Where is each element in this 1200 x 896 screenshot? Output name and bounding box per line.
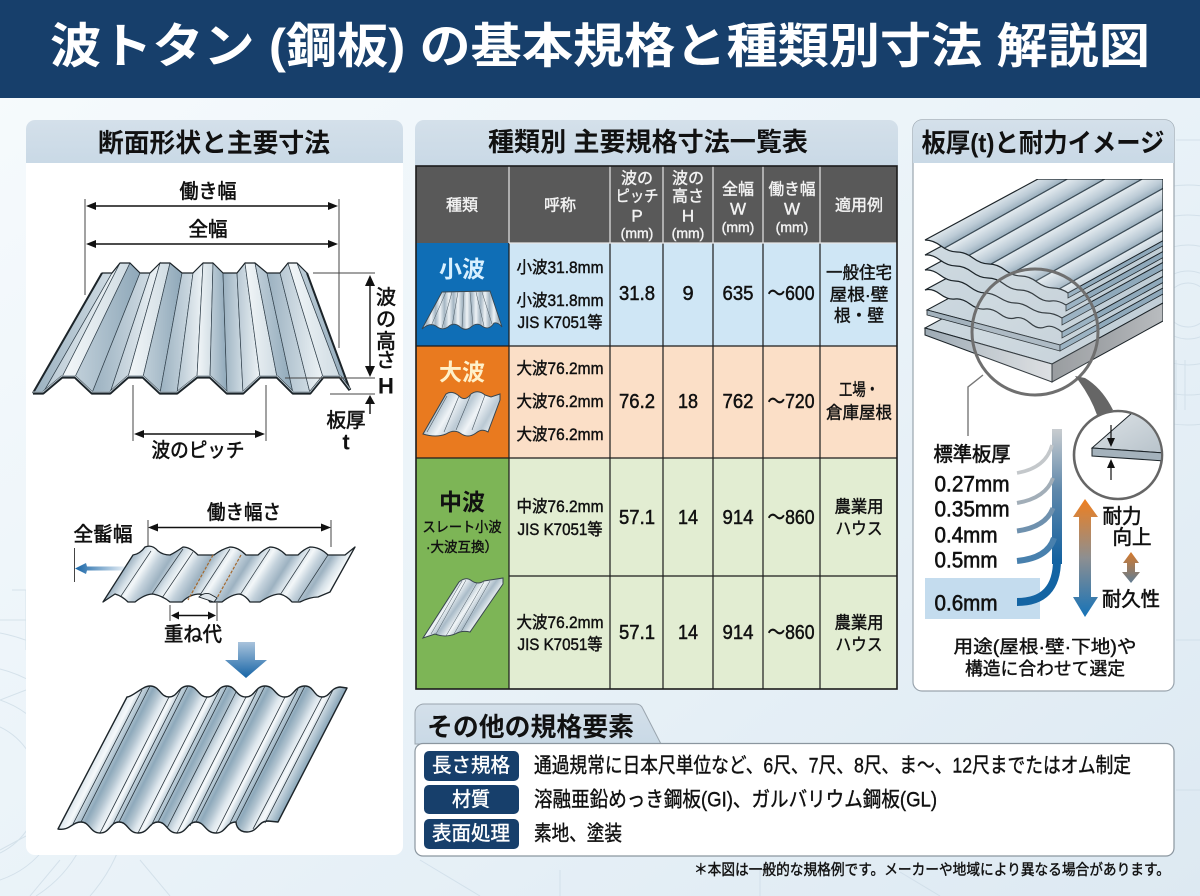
dimension: sheet thickness t: [326, 395, 375, 454]
row: interchangeable large wave: 大波76.2mm: [516, 613, 604, 632]
row: interchangeable large wave: JIS K7051等: [518, 635, 602, 654]
thickness list: 0.35mm: [934, 496, 1010, 522]
row: small wave: 屋根·壁: [830, 286, 888, 304]
row: small wave: JIS K7051等: [518, 313, 602, 332]
arrow: small trade-off: [1122, 552, 1140, 583]
dimension: full width: [86, 218, 338, 248]
dimension: full width arrow: 全髷幅: [74, 523, 132, 546]
panel: thickness and strength: [913, 120, 1174, 691]
thickness list: 標準板厚: [934, 443, 1010, 466]
dimension: wave pitch: 波のピッチ: [152, 439, 244, 462]
table header row: W: [784, 200, 800, 218]
row: large wave: ～720: [768, 391, 814, 413]
dimension: wave height H: さ: [376, 350, 396, 372]
panel: other specifications: [415, 704, 1174, 856]
row: large wave: 大波: [439, 359, 485, 385]
thickness list: 0.27mm: [934, 472, 1010, 496]
row: surface treatment: 素地、塗装: [534, 822, 622, 846]
icon: medium wave sheet: [423, 578, 503, 638]
detail circle: sheet thickness: [1074, 411, 1165, 499]
table header row: H: [682, 206, 694, 226]
thickness gradient curves: [1017, 429, 1062, 602]
row: medium wave: JIS K7051等: [518, 520, 602, 539]
row: large wave: 工場・: [839, 380, 879, 400]
row: interchangeable large wave: 農業用: [834, 614, 884, 632]
table header row: P: [631, 206, 643, 226]
row: small wave: 9: [682, 283, 694, 305]
table header row: 波の: [672, 170, 704, 188]
row: large wave: 大波76.2mm: [516, 425, 604, 444]
row: surface treatment: [424, 819, 622, 849]
row: small wave: 31.8: [619, 283, 655, 305]
dimension: full width: 全幅: [188, 218, 228, 241]
dimension: sheet thickness t: 板厚: [326, 409, 366, 432]
connector to detail circle: [1075, 376, 1113, 415]
table header row: 全幅: [722, 180, 754, 198]
label: durability: 耐久性: [1102, 588, 1160, 611]
row: interchangeable large wave: [516, 613, 884, 654]
selection note: 用途(屋根·壁·下地)や: [954, 637, 1136, 657]
dimension: full width arrow: [74, 523, 132, 582]
table header row: 働き幅: [768, 180, 816, 198]
dimension: working width: [85, 180, 339, 348]
row: large wave: 76.2: [619, 391, 655, 413]
dimension: working width of overlapped sheets: [148, 501, 331, 547]
row: small wave: 根・壁: [834, 306, 884, 326]
heading: table: 種類別 主要規格寸法一覧表: [488, 127, 808, 157]
title: 波トタン (鋼板) の基本規格と種類別寸法 解説図: [50, 20, 1150, 74]
row: medium wave: 14: [678, 507, 698, 529]
dimension: overlap: 重ね代: [164, 623, 222, 646]
label: strength up: [1102, 505, 1152, 549]
icon: small wave sheet: [422, 291, 502, 329]
row: small wave: [422, 256, 892, 332]
table header row: (mm): [722, 219, 754, 235]
table header row: (mm): [776, 219, 808, 235]
dimension: wave height H: 波: [376, 286, 396, 309]
table header row: 高さ: [672, 188, 704, 206]
arrow: strength and durability: [1073, 499, 1098, 617]
dimension: wave pitch: [133, 385, 266, 462]
heading: thickness: 板厚(t)と耐力イメージ: [922, 128, 1164, 158]
row: medium wave: スレート小波: [422, 519, 502, 535]
table grid and cell fills: [416, 166, 897, 689]
selection note: [954, 637, 1136, 679]
row: small wave: 一般住宅: [826, 264, 892, 282]
thickness list: 0.6mm: [934, 590, 998, 616]
icon: large wave sheet: [423, 392, 500, 436]
table header row: 種類: [446, 196, 478, 214]
row: medium wave: 農業用: [834, 498, 884, 516]
dimension: overlap: [164, 603, 222, 646]
title banner: [0, 0, 1200, 98]
dimension: wave height H: の: [376, 309, 396, 331]
thickness list: [925, 429, 1062, 619]
row: large wave: [423, 359, 892, 444]
arrow: down: [225, 642, 267, 678]
heading: other specifications: その他の規格要素: [427, 712, 634, 742]
row: material: [424, 785, 937, 814]
row: interchangeable large wave: 914: [722, 622, 754, 644]
row: large wave: 762: [722, 391, 754, 413]
row: material: 溶融亜鉛めっき鋼板(GI)、ガルバリウム鋼板(GL): [534, 788, 937, 812]
row: medium wave: ～860: [768, 507, 814, 529]
label: strength up: 耐力: [1102, 505, 1142, 528]
dimension: working width of overlapped sheets: 働き幅さ: [207, 501, 281, 524]
row: medium wave: 中波: [439, 489, 485, 515]
table header row: 適用例: [835, 196, 883, 214]
table header row: [446, 170, 883, 241]
row: small wave: 小波: [439, 256, 485, 282]
row: medium wave: 57.1: [619, 507, 655, 529]
row: large wave: 大波76.2mm: [516, 392, 604, 411]
selection note: 構造に合わせて選定: [965, 659, 1125, 679]
drawing: stacked sheets: [925, 179, 1163, 382]
row: interchangeable large wave: 57.1: [619, 622, 655, 644]
row: large wave: 倉庫屋根: [826, 404, 892, 422]
row: small wave: 小波31.8mm: [516, 291, 604, 310]
dimension: sheet thickness t: t: [342, 430, 350, 454]
dimension: wave height H: [285, 273, 396, 398]
row: surface treatment: 表面処理: [432, 822, 510, 845]
row: medium wave: 中波76.2mm: [516, 497, 604, 516]
row: interchangeable large wave: ～860: [768, 622, 814, 644]
row: large wave: 18: [678, 391, 698, 413]
panel: specification table: [415, 120, 898, 689]
drawing: overlapped sheets: [103, 546, 355, 602]
row: small wave: 635: [722, 283, 754, 305]
row: small wave: ～600: [768, 283, 814, 305]
row: medium wave: 914: [722, 507, 754, 529]
drawing: corrugated sheet main: [33, 263, 350, 393]
row: medium wave: [422, 489, 884, 638]
dimension: working width: 働き幅: [180, 180, 236, 203]
table header row: W: [730, 200, 746, 218]
connector line to thickness list: [968, 375, 983, 436]
row: medium wave: ハウス: [836, 520, 882, 538]
dimension: wave height H: H: [378, 374, 394, 398]
table header row: 波の: [621, 170, 653, 188]
dimension: wave height H: 高: [376, 330, 396, 353]
table header row: 呼称: [544, 196, 576, 214]
row: interchangeable large wave: ハウス: [836, 636, 882, 654]
heading: cross section: 断面形状と主要寸法: [98, 128, 330, 158]
row: material: 材質: [452, 788, 490, 811]
row: small wave: 小波31.8mm: [516, 258, 604, 277]
row: medium wave: ·大波互換）: [426, 539, 498, 555]
thickness list: 0.4mm: [934, 522, 998, 548]
drawing: laid sheet: [58, 686, 347, 833]
thickness list: 0.5mm: [934, 548, 998, 572]
label: strength up: 向上: [1112, 526, 1152, 549]
panel: cross section and main dimensions: [26, 120, 403, 855]
row: interchangeable large wave: 14: [678, 622, 698, 644]
table header row: (mm): [672, 225, 704, 241]
row: length: 長さ規格: [432, 754, 510, 777]
table header row: ピッチ: [616, 188, 658, 206]
table header row: (mm): [621, 225, 653, 241]
row: large wave: 大波76.2mm: [516, 359, 604, 378]
row: length: [424, 751, 1131, 781]
magnifier circle: [972, 269, 1098, 395]
